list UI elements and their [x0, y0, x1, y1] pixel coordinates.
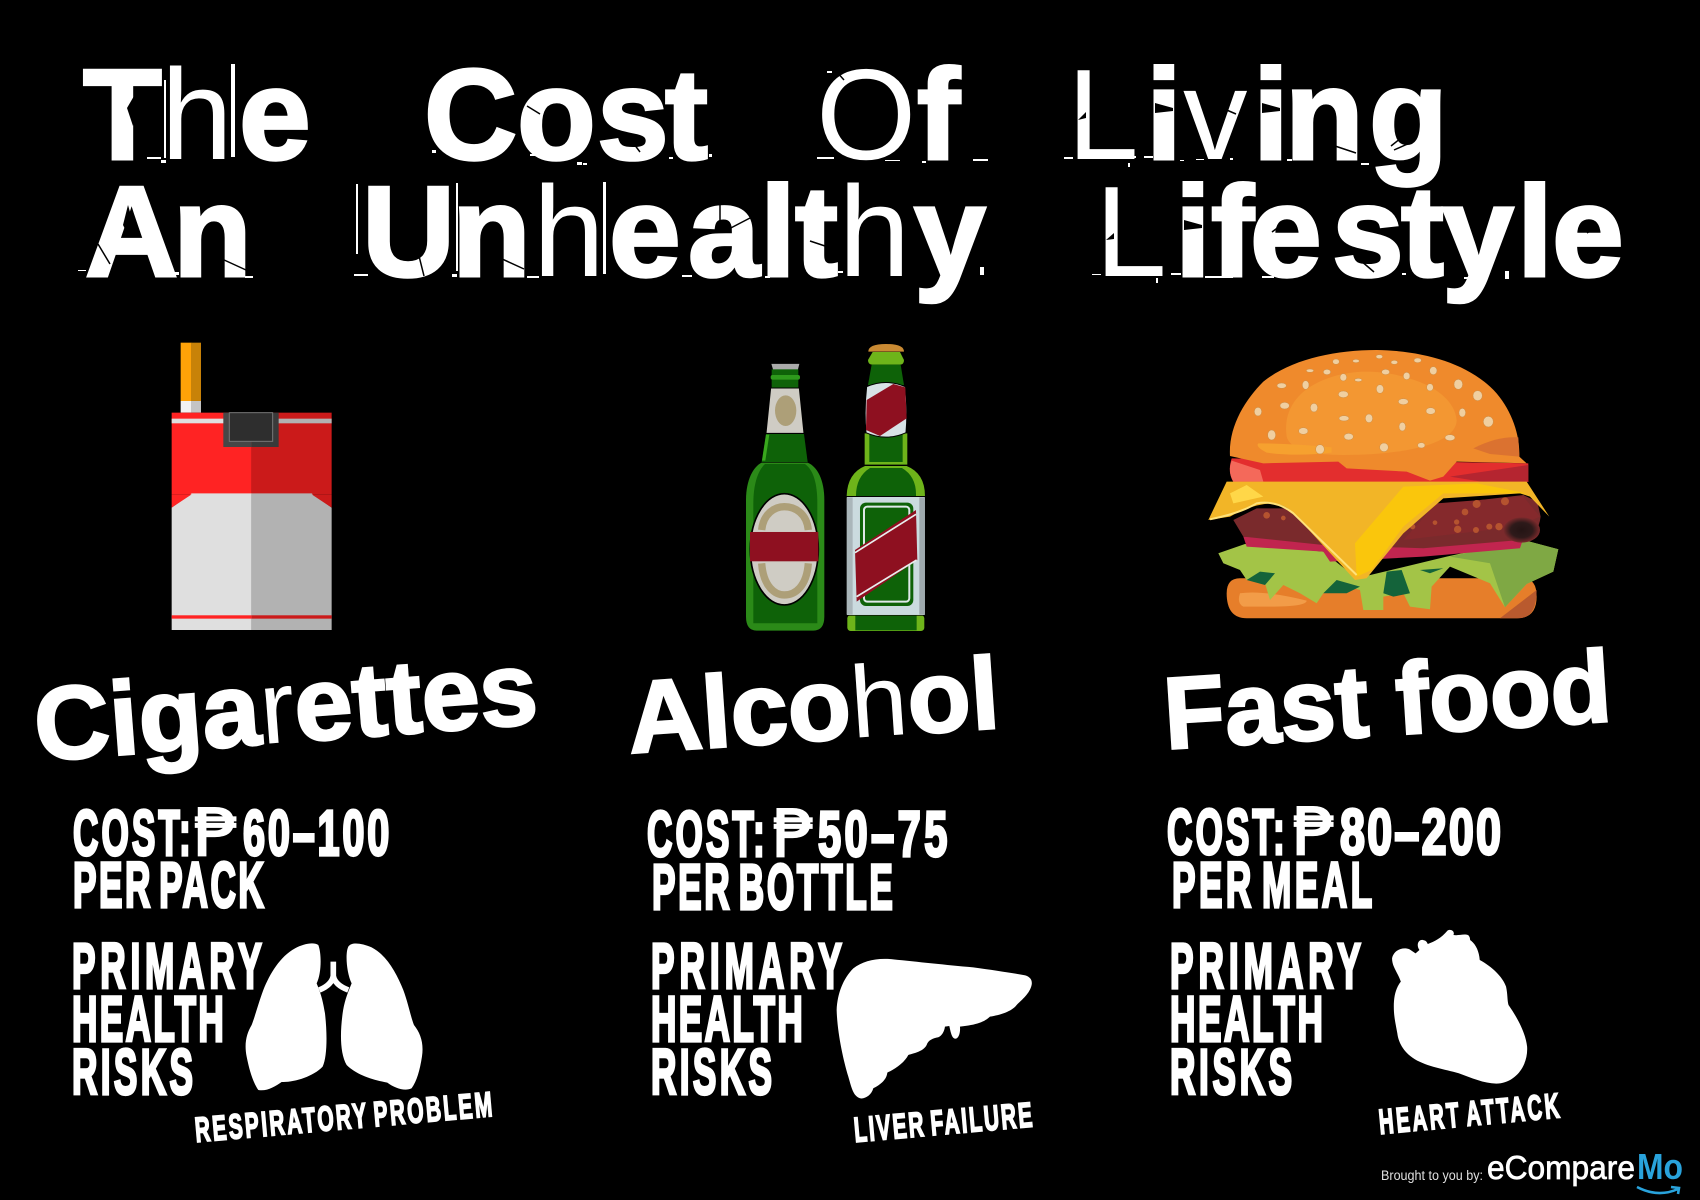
title line 1: The Cost Of Living: g [1369, 43, 1448, 187]
illustration: cheeseburger [1208, 350, 1558, 618]
title line 2: An Unhealthy Lifestyle: U [362, 160, 455, 304]
icon: lungs [246, 943, 423, 1090]
title line 1: The Cost Of Living: L [1067, 43, 1139, 187]
title line 1: The Cost Of Living: O [816, 43, 916, 187]
cost text: 80–200 [1340, 796, 1501, 868]
title line 2: An Unhealthy Lifestyle: l [760, 160, 796, 304]
title line 1: The Cost Of Living: i [1253, 43, 1289, 187]
primary health risks text: PRIMARY [1170, 930, 1361, 1002]
lettuce [1218, 540, 1558, 610]
tomato [1230, 458, 1528, 482]
cost text: COST: [1167, 796, 1285, 868]
title line 1: The Cost Of Living: i [1146, 43, 1182, 187]
illustration: cigarette pack [172, 343, 332, 630]
cost text: COST: [73, 797, 191, 869]
primary health risks text [72, 930, 262, 1108]
heading: Fast food: Fast food [1160, 629, 1614, 771]
title line 2: An Unhealthy Lifestyle: h [533, 160, 605, 304]
cost text: 60–100 [243, 799, 389, 869]
title line 2: An Unhealthy Lifestyle: a [688, 160, 761, 304]
panel: cigarettes [30, 343, 541, 1150]
title line 2: An Unhealthy Lifestyle: e [609, 160, 681, 304]
onion [1243, 537, 1523, 562]
panel: alcohol [624, 344, 1034, 1150]
cost text: ₱ [772, 796, 816, 873]
cost text: PER PACK [73, 849, 264, 921]
title line 2: An Unhealthy Lifestyle: l [1517, 160, 1553, 304]
cost text: PER MEAL [1172, 849, 1372, 921]
heading: Alcohol: Alcohol [624, 636, 1003, 775]
label: respiratory problem: RESPIRATORY PROBLEM [193, 1086, 494, 1150]
title line 2: An Unhealthy Lifestyle: A [85, 160, 178, 304]
logo wordmark: eCompare [1487, 1149, 1635, 1186]
title line 2: An Unhealthy Lifestyle: e [1250, 160, 1322, 304]
bottom bun [1227, 578, 1537, 618]
cost text [73, 795, 389, 921]
primary health risks text: PRIMARY [651, 930, 842, 1002]
title line 2: An Unhealthy Lifestyle: s [1332, 160, 1404, 304]
cost text: COST: [647, 798, 765, 870]
title line 1: The Cost Of Living: s [597, 43, 669, 187]
title line 1: The Cost Of Living: v [1183, 43, 1248, 187]
title line 2: An Unhealthy Lifestyle: n [173, 160, 252, 304]
title line 1: The Cost Of Living [83, 43, 1448, 187]
cheese [1208, 482, 1549, 580]
primary health risks text: RISKS [651, 1036, 772, 1108]
patty [1233, 495, 1541, 573]
title line 2: An Unhealthy Lifestyle: e [1552, 160, 1624, 304]
illustration: beer bottles [746, 344, 925, 631]
icon: liver [837, 959, 1032, 1098]
title line 1: The Cost Of Living: t [665, 43, 708, 187]
cost text [647, 796, 947, 923]
primary health risks text [651, 930, 842, 1108]
title line 1: The Cost Of Living: C [424, 43, 517, 187]
cost text: PER BOTTLE [652, 851, 893, 923]
left bottle [746, 363, 824, 631]
title line 2: An Unhealthy Lifestyle: t [795, 160, 838, 304]
title line 2: An Unhealthy Lifestyle: i [1175, 160, 1211, 304]
sesame seeds [1254, 355, 1493, 454]
heading: Cigarettes: Cigarettes [30, 630, 541, 784]
title line 2: An Unhealthy Lifestyle: t [1401, 160, 1444, 304]
label: heart attack: HEART ATTACK [1377, 1087, 1561, 1143]
right bottle [847, 344, 925, 631]
title line 2: An Unhealthy Lifestyle: y [914, 160, 986, 304]
primary health risks text: RISKS [1170, 1036, 1292, 1108]
label: liver failure: LIVER FAILURE [852, 1096, 1034, 1150]
cost text: 50–75 [818, 799, 947, 870]
title line 1: The Cost Of Living: T [83, 43, 162, 187]
title line 1: The Cost Of Living: h [161, 43, 233, 187]
icon: heart [1392, 930, 1527, 1084]
title line 2: An Unhealthy Lifestyle: f [1211, 160, 1255, 304]
logo accent: Mo [1637, 1146, 1683, 1187]
panel: fast food [1160, 350, 1614, 1143]
footer: brought to you by logo [1381, 1146, 1683, 1194]
primary health risks text: PRIMARY [72, 930, 262, 1002]
primary health risks text: HEALTH [651, 983, 803, 1055]
title line 2: An Unhealthy Lifestyle: h [838, 160, 910, 304]
title line 1: The Cost Of Living: o [517, 43, 596, 187]
title line 1: The Cost Of Living: e [239, 43, 311, 187]
primary health risks text: HEALTH [1170, 983, 1323, 1055]
title line 2: An Unhealthy Lifestyle: n [452, 160, 531, 304]
logo swoosh [1637, 1187, 1679, 1194]
brought to you by text: Brought to you by: [1381, 1168, 1483, 1183]
primary health risks text [1170, 930, 1361, 1108]
title line 1: The Cost Of Living: n [1285, 43, 1364, 187]
cost text [1167, 794, 1501, 921]
cost text: ₱ [1292, 794, 1337, 871]
title line 1: The Cost Of Living: f [917, 43, 961, 187]
cost text: ₱ [193, 795, 240, 872]
primary health risks text: RISKS [72, 1036, 193, 1108]
title line 2: An Unhealthy Lifestyle: y [1442, 160, 1514, 304]
title line 2: An Unhealthy Lifestyle: L [1095, 160, 1167, 304]
top bun [1230, 350, 1527, 481]
title [78, 43, 1624, 304]
title line 2: An Unhealthy Lifestyle [78, 160, 1624, 304]
primary health risks text: HEALTH [72, 983, 224, 1055]
